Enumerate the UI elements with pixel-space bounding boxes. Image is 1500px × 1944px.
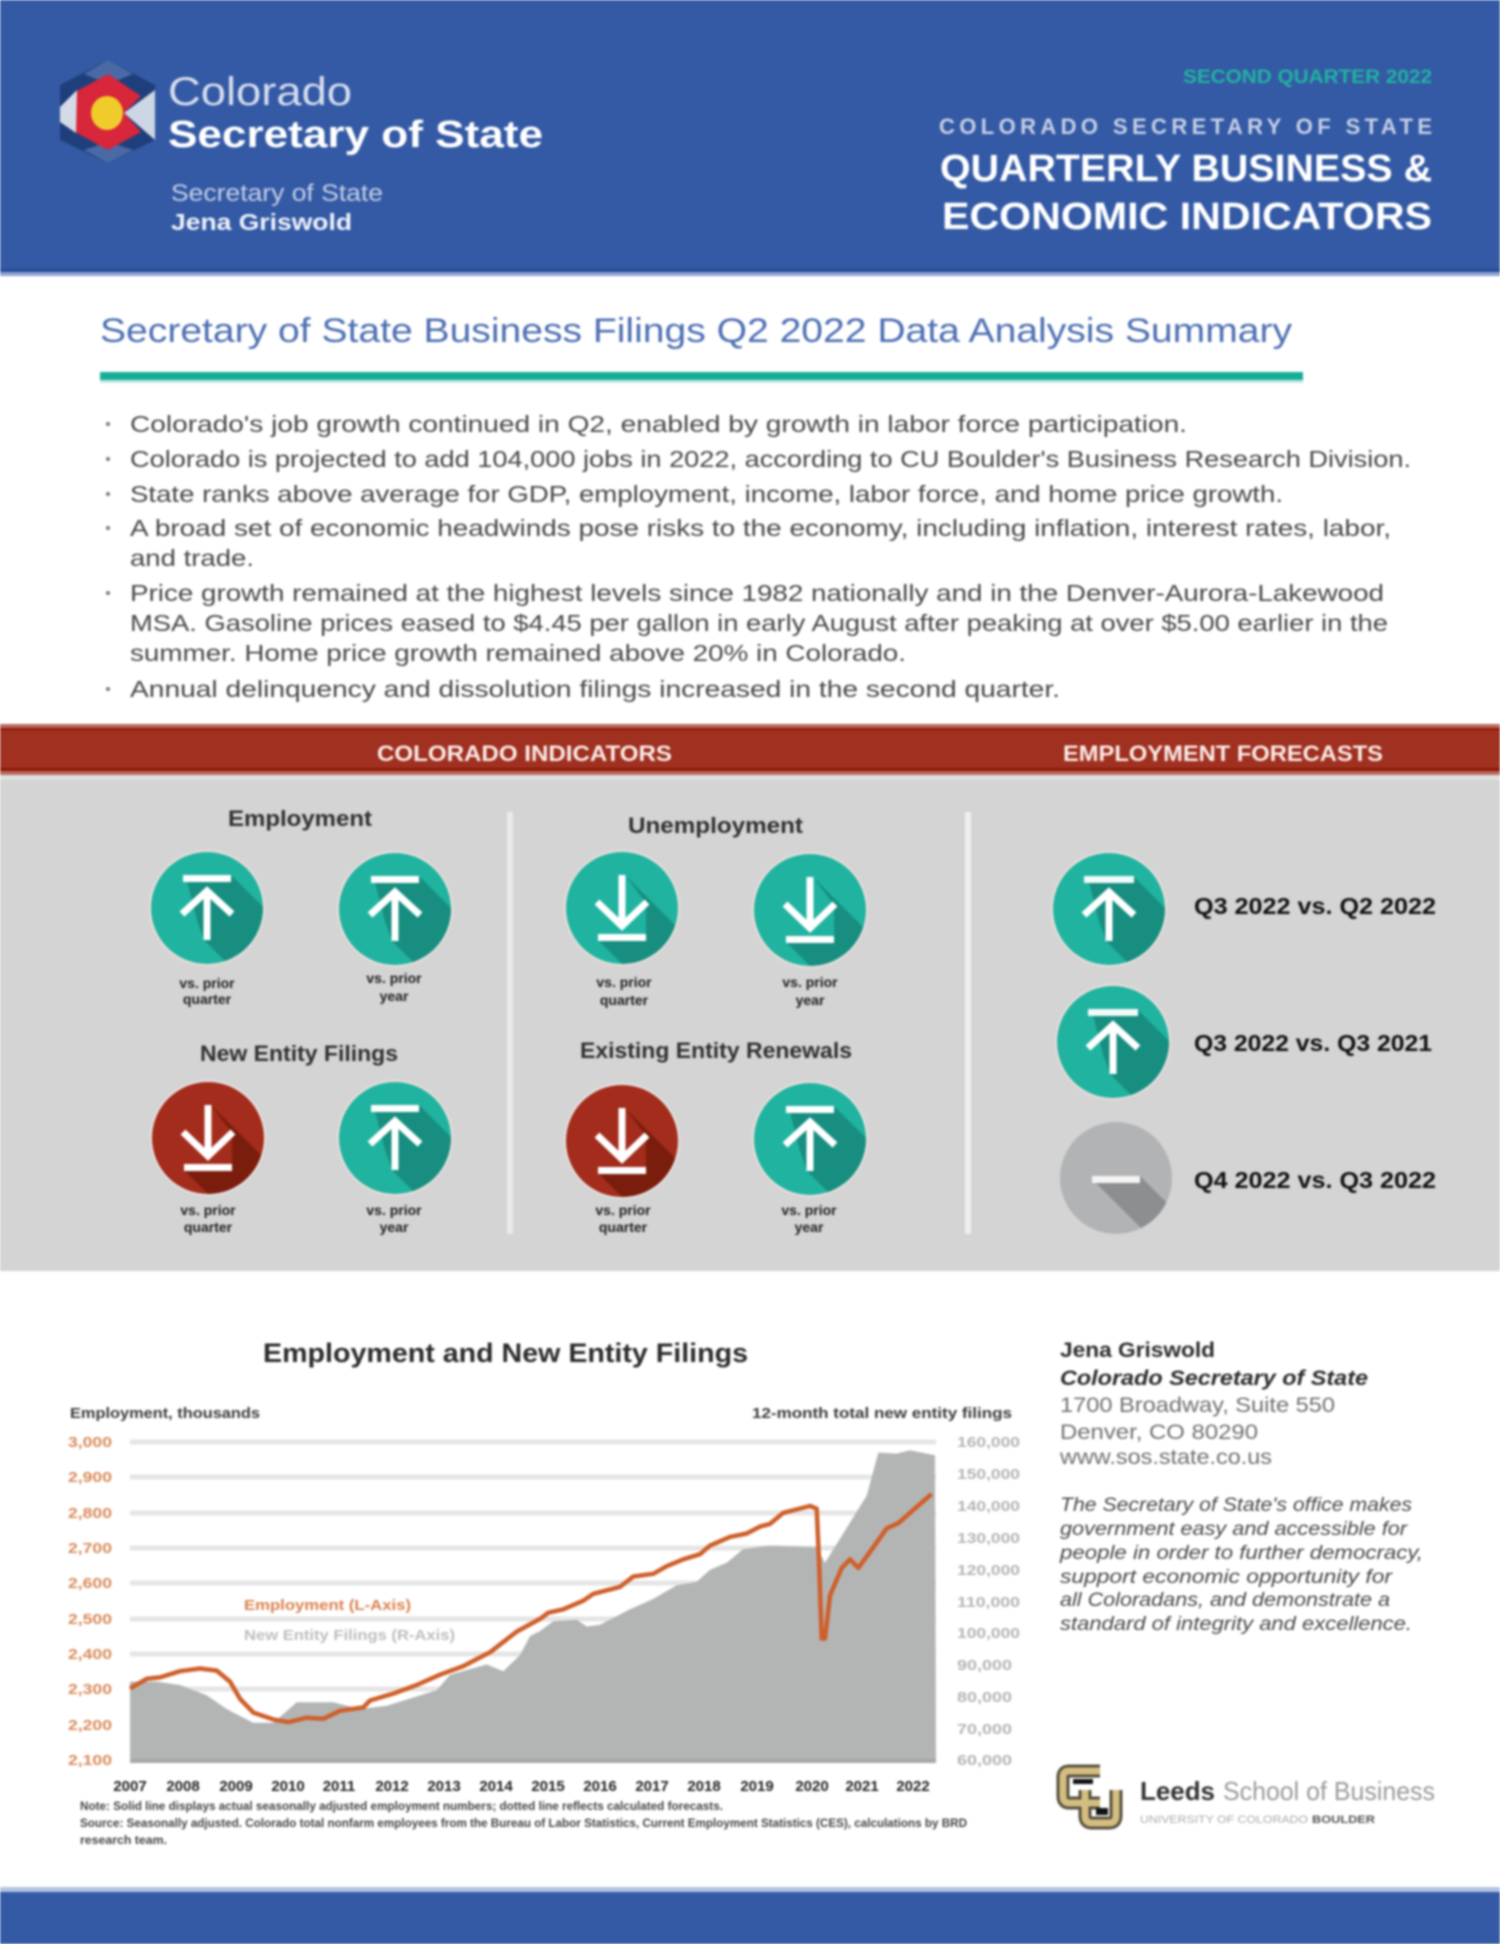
Leeds School of Business wordmark: Leeds: [1140, 1776, 1215, 1806]
label: vs prior quarter: vs. prior: [180, 1202, 236, 1218]
year labels: 2011: [323, 1778, 355, 1795]
label: vs prior year: year: [795, 1219, 824, 1235]
heading: employment: Employment: [228, 806, 373, 831]
year labels: [113, 1778, 930, 1795]
contact block: Jena Griswold: [1060, 1339, 1215, 1362]
report title block: COLORADO SECRETARY OF STATE: [939, 114, 1432, 139]
right axis labels: 110,000: [957, 1594, 1020, 1611]
label: vs prior year: year: [796, 992, 825, 1008]
icon: employment vs prior quarter up: [150, 851, 264, 965]
year labels: 2018: [687, 1778, 721, 1795]
year labels: 2021: [845, 1778, 879, 1795]
left axis labels: 2,300: [68, 1681, 112, 1698]
panel: indicators: [0, 775, 1500, 1271]
right axis labels: 100,000: [957, 1625, 1020, 1642]
icon: unemployment vs prior year down: [753, 853, 867, 968]
right axis labels: [957, 1434, 1020, 1769]
text block: summary bullets: Colorado is projected to add 104,000 jobs in 2022, according to CU Boulder's Business Research Division.: [130, 446, 1411, 472]
left axis labels: 2,100: [68, 1752, 112, 1769]
right axis labels: 120,000: [957, 1562, 1020, 1579]
label: vs prior year: year: [380, 1219, 409, 1235]
label: vs prior year: vs. prior: [782, 974, 838, 990]
year labels: 2012: [375, 1778, 409, 1795]
report title block: ECONOMIC INDICATORS: [942, 196, 1432, 238]
left axis labels: 2,600: [68, 1575, 112, 1592]
label: vs prior quarter: vs. prior: [596, 974, 652, 990]
label: vs prior year: vs. prior: [366, 1202, 422, 1218]
year labels: 2019: [740, 1778, 774, 1795]
report title block: [939, 67, 1432, 238]
label: vs prior quarter: quarter: [183, 991, 232, 1007]
heading: new entity filings: New Entity Filings: [200, 1041, 398, 1066]
icon: existing entity renewals vs prior year up: [753, 1082, 868, 1196]
icon: employment vs prior year up: [338, 852, 452, 966]
text block: summary bullets: A broad set of economic headwinds pose risks to the economy, including inflation, interest rates, labor,: [130, 515, 1391, 541]
mission statement: [1059, 1495, 1423, 1635]
line: employment: [130, 1494, 932, 1722]
contact block: 1700 Broadway, Suite 550: [1060, 1394, 1335, 1417]
mission statement: people in order to further democracy,: [1059, 1543, 1423, 1564]
chart note: research team.: [80, 1833, 167, 1847]
label: vs prior year: year: [380, 988, 409, 1004]
label: vs prior quarter: quarter: [600, 992, 649, 1008]
footer band: [0, 1887, 1500, 1944]
right axis labels: 60,000: [957, 1752, 1012, 1769]
left axis labels: 3,000: [68, 1434, 112, 1451]
left axis labels: [68, 1434, 112, 1769]
label: vs prior year: vs. prior: [781, 1202, 837, 1218]
legend: Employment (L-Axis): [244, 1597, 411, 1614]
chart note: [80, 1799, 967, 1847]
section banner: [0, 724, 1500, 775]
section banner: COLORADO INDICATORS: [377, 741, 672, 766]
text block: summary bullets: Annual delinquency and dissolution filings increased in the second quarter.: [130, 676, 1060, 702]
logo wordmark: Secretary of State: [168, 114, 543, 156]
contact block: Denver, CO 80290: [1060, 1421, 1258, 1444]
chart: employment and new entity filings: [68, 1405, 1020, 1795]
year labels: 2013: [427, 1778, 461, 1795]
left axis labels: 2,700: [68, 1540, 112, 1557]
left axis title: Employment, thousands: [70, 1405, 260, 1422]
report title block: QUARTERLY BUSINESS &: [940, 148, 1432, 190]
text block: summary bullets: summer. Home price growth remained above 20% in Colorado.: [130, 640, 906, 666]
right axis labels: 130,000: [957, 1530, 1020, 1547]
text block: summary bullets: Colorado's job growth continued in Q2, enabled by growth in labor force participation.: [130, 411, 1187, 437]
label: vs prior quarter: vs. prior: [179, 975, 235, 991]
icon: CU interlocking logo: [1063, 1771, 1116, 1823]
mission statement: The Secretary of State's office makes: [1060, 1495, 1413, 1516]
left axis labels: 2,500: [68, 1611, 112, 1628]
label: vs prior quarter: quarter: [184, 1219, 233, 1235]
year labels: 2008: [166, 1778, 200, 1795]
icon: forecast Q3 vs Q3 up: [1056, 985, 1170, 1099]
year labels: 2020: [795, 1778, 829, 1795]
icon: unemployment vs prior quarter down: [565, 851, 679, 966]
left axis labels: 2,900: [68, 1469, 112, 1486]
text block: summary bullets: and trade.: [130, 545, 254, 571]
office holder: [171, 180, 383, 235]
mission statement: support economic opportunity for: [1060, 1567, 1393, 1588]
mission statement: government easy and accessible for: [1060, 1519, 1408, 1540]
legend: New Entity Filings (R-Axis): [244, 1627, 455, 1644]
icon: Colorado flag hexagon logo: [60, 60, 155, 163]
year labels: 2022: [896, 1778, 930, 1795]
heading: unemployment: Unemployment: [628, 813, 804, 838]
report title block: SECOND QUARTER 2022: [1183, 67, 1432, 88]
Leeds School of Business wordmark: [1140, 1776, 1435, 1826]
year labels: 2017: [635, 1778, 669, 1795]
year labels: 2015: [531, 1778, 565, 1795]
label: vs prior quarter: vs. prior: [595, 1202, 651, 1218]
text block: summary bullets: Price growth remained at the highest levels since 1982 nationally and in the Denver-Aurora-Lakewood: [130, 580, 1384, 606]
label: Q3 2022 vs Q3 2021: Q3 2022 vs. Q3 2021: [1194, 1030, 1432, 1056]
right axis labels: 90,000: [957, 1657, 1012, 1674]
left axis labels: 2,400: [68, 1646, 112, 1663]
contact block: [1059, 1339, 1368, 1469]
label: Q4 2022 vs Q3 2022: Q4 2022 vs. Q3 2022: [1194, 1167, 1436, 1193]
label: vs prior year: vs. prior: [366, 970, 422, 986]
heading: data analysis summary: Secretary of State Business Filings Q2 2022 Data Analysis Summary: [100, 312, 1292, 350]
label: Q3 2022 vs Q2 2022: Q3 2022 vs. Q2 2022: [1194, 893, 1436, 919]
mission statement: all Coloradans, and demonstrate a: [1060, 1590, 1390, 1611]
chart note: Note: Solid line displays actual seasonally adjusted employment numbers; dotted line reflects calculated forecasts.: [80, 1799, 723, 1813]
Leeds School of Business wordmark: School of Business: [1223, 1776, 1435, 1806]
icon: new entity filings vs prior year up: [338, 1081, 452, 1195]
year labels: 2007: [113, 1778, 147, 1795]
icon: forecast Q4 vs Q3 neutral: [1060, 1122, 1172, 1234]
right axis title: 12-month total new entity filings: [752, 1405, 1012, 1422]
logo wordmark: Colorado: [168, 70, 352, 114]
year labels: 2009: [219, 1778, 253, 1795]
contact block: Colorado Secretary of State: [1060, 1367, 1368, 1390]
text block: summary bullets: MSA. Gasoline prices eased to $4.45 per gallon in early August after peaking at over $5.00 earlier in the: [130, 610, 1388, 636]
Leeds School of Business wordmark: UNIVERSITY OF COLORADO: [1140, 1814, 1308, 1826]
left axis labels: 2,200: [68, 1717, 112, 1734]
chart note: Source: Seasonally adjusted. Colorado total nonfarm employees from the Bureau of Labor Statistics, Current Employment Statistics (CES), calculations by BRD: [80, 1816, 967, 1830]
contact block: www.sos.state.co.us: [1059, 1446, 1272, 1469]
office holder: Secretary of State: [171, 180, 383, 207]
year labels: 2010: [271, 1778, 305, 1795]
header band: [0, 0, 1500, 276]
icon: forecast Q3 vs Q2 up: [1052, 852, 1166, 966]
area: new entity filings: [130, 1450, 936, 1763]
section banner: EMPLOYMENT FORECASTS: [1063, 741, 1383, 766]
icon: existing entity renewals vs prior quarter down: [564, 1084, 680, 1198]
year labels: 2016: [583, 1778, 617, 1795]
Leeds School of Business wordmark: BOULDER: [1312, 1814, 1375, 1826]
right axis labels: 160,000: [957, 1434, 1020, 1451]
heading: existing entity renewals: Existing Entity Renewals: [580, 1038, 852, 1063]
right axis labels: 80,000: [957, 1689, 1012, 1706]
text block: summary bullets: State ranks above average for GDP, employment, income, labor force, and home price growth.: [130, 481, 1283, 507]
icon: new entity filings vs prior quarter down: [150, 1080, 266, 1196]
right axis labels: 150,000: [957, 1466, 1020, 1483]
logo wordmark: [168, 70, 543, 156]
chart title: Employment and New Entity Filings: [263, 1338, 748, 1368]
label: vs prior quarter: quarter: [599, 1219, 648, 1235]
right axis labels: 70,000: [957, 1721, 1012, 1738]
text block: summary bullets: [106, 411, 1411, 702]
office holder: Jena Griswold: [171, 209, 352, 235]
left axis labels: 2,800: [68, 1505, 112, 1522]
year labels: 2014: [479, 1778, 513, 1795]
legend: [244, 1597, 455, 1644]
right axis labels: 140,000: [957, 1498, 1020, 1515]
mission statement: standard of integrity and excellence.: [1060, 1614, 1412, 1635]
